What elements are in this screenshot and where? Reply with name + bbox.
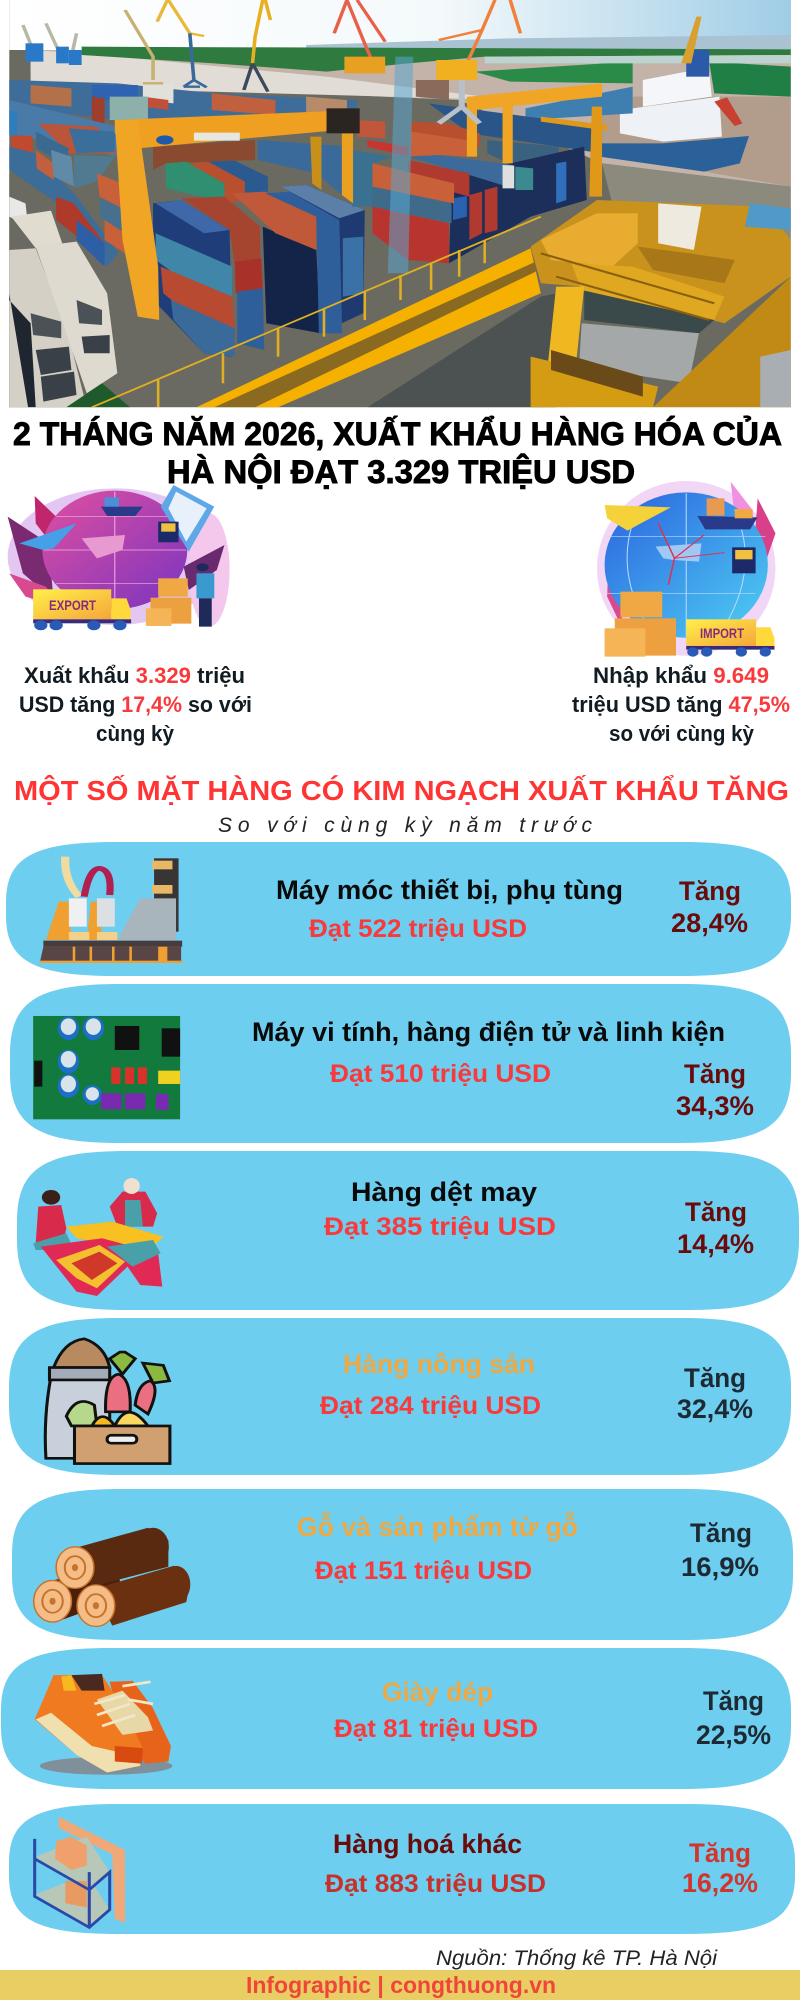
title: HÀ NỘI ĐẠT 3.329 TRIỆU USD	[167, 454, 635, 490]
icon: export illustration	[8, 485, 230, 630]
product name: Hàng dệt may	[351, 1177, 537, 1207]
left rows	[9, 100, 117, 157]
section subtitle: So với cùng kỳ năm trước	[218, 814, 592, 837]
panel: machinery	[6, 842, 791, 976]
railing	[92, 217, 541, 407]
reefers	[9, 196, 27, 218]
panel: electronics	[10, 984, 791, 1143]
growth	[677, 1363, 753, 1424]
harbour cranes	[23, 0, 520, 123]
export value: Đạt 81 triệu USD	[334, 1715, 538, 1743]
growth: Tăng	[689, 1838, 751, 1868]
panel: wood products	[12, 1489, 793, 1640]
export value: Đạt 510 triệu USD	[330, 1060, 551, 1088]
product name: Giày dép	[382, 1677, 493, 1707]
product name: Hàng nông sản	[343, 1349, 535, 1379]
export value: Đạt 284 triệu USD	[320, 1392, 541, 1420]
icon: textile sellers	[33, 1178, 163, 1296]
growth	[681, 1518, 759, 1582]
growth: 14,4%	[677, 1229, 754, 1259]
growth: Tăng	[690, 1518, 752, 1548]
icon: running shoes	[35, 1674, 172, 1775]
icon: circuit board	[33, 1016, 180, 1119]
export value: Đạt 883 triệu USD	[325, 1870, 546, 1898]
hero photo: container port	[9, 0, 791, 407]
product name: Gỗ và sản phẩm từ gỗ	[297, 1511, 578, 1542]
growth	[696, 1686, 771, 1750]
import summary text	[572, 663, 790, 746]
growth: Tăng	[685, 1197, 747, 1227]
yellow RTG crane 2	[469, 83, 602, 110]
icon: logs	[34, 1528, 190, 1626]
export summary text: cùng kỳ	[96, 721, 175, 746]
growth: Tăng	[684, 1059, 746, 1089]
growth	[677, 1197, 754, 1259]
export summary text	[19, 663, 252, 746]
import summary text: so với cùng kỳ	[609, 721, 755, 746]
product name: Hàng hoá khác	[333, 1829, 522, 1859]
lattice tower	[388, 57, 413, 273]
source note: Nguồn: Thống kê TP. Hà Nội	[436, 1947, 718, 1970]
title: 2 THÁNG NĂM 2026, XUẤT KHẨU HÀNG HÓA CỦA	[13, 416, 782, 452]
growth: 22,5%	[696, 1720, 771, 1750]
ship	[597, 136, 749, 172]
export value: Đạt 151 triệu USD	[315, 1557, 532, 1585]
section heading: MỘT SỐ MẶT HÀNG CÓ KIM NGẠCH XUẤT KHẨU TĂNG	[14, 774, 789, 806]
big yellow girder	[196, 248, 541, 407]
growth: 32,4%	[677, 1394, 753, 1424]
panel: footwear	[1, 1648, 791, 1789]
growth: 34,3%	[676, 1091, 754, 1121]
growth: 28,4%	[671, 908, 748, 938]
growth	[682, 1838, 758, 1898]
export summary text: USD tăng 17,4% so với	[19, 692, 252, 717]
panel: agricultural products	[9, 1318, 791, 1475]
title	[13, 416, 782, 490]
product name: Máy móc thiết bị, phụ tùng	[276, 875, 623, 905]
footer bar	[0, 1970, 800, 2000]
growth: Tăng	[684, 1363, 746, 1393]
yellow RTG crane 1	[114, 111, 327, 148]
import summary text: Nhập khẩu 9.649	[593, 663, 769, 688]
panel: other goods	[9, 1804, 795, 1934]
icon: warehouse shelves	[35, 1817, 125, 1927]
icon: import illustration	[597, 481, 776, 657]
icon: produce crate	[45, 1339, 170, 1464]
growth: Tăng	[679, 876, 741, 906]
panel: textiles	[17, 1151, 799, 1310]
far stacks	[9, 80, 357, 123]
icon: import illustration: IMPORT	[700, 625, 744, 641]
import summary text: triệu USD tăng 47,5%	[572, 692, 790, 717]
export summary text: Xuất khẩu 3.329 triệu	[24, 663, 245, 688]
icon: export illustration: EXPORT	[49, 597, 96, 613]
growth: 16,2%	[682, 1868, 758, 1898]
product name: Máy vi tính, hàng điện tử và linh kiện	[252, 1017, 725, 1047]
icon: factory machine	[40, 857, 183, 963]
growth: 16,9%	[681, 1552, 759, 1582]
export value: Đạt 385 triệu USD	[324, 1213, 556, 1241]
growth	[676, 1059, 754, 1121]
export value: Đạt 522 triệu USD	[309, 915, 527, 943]
mid stacks under crane	[153, 140, 255, 170]
growth: Tăng	[703, 1686, 764, 1716]
growth	[671, 876, 748, 938]
right stacks	[357, 120, 385, 138]
footer bar: Infographic | congthuong.vn	[246, 1972, 556, 1998]
machine-house crane	[531, 200, 791, 323]
